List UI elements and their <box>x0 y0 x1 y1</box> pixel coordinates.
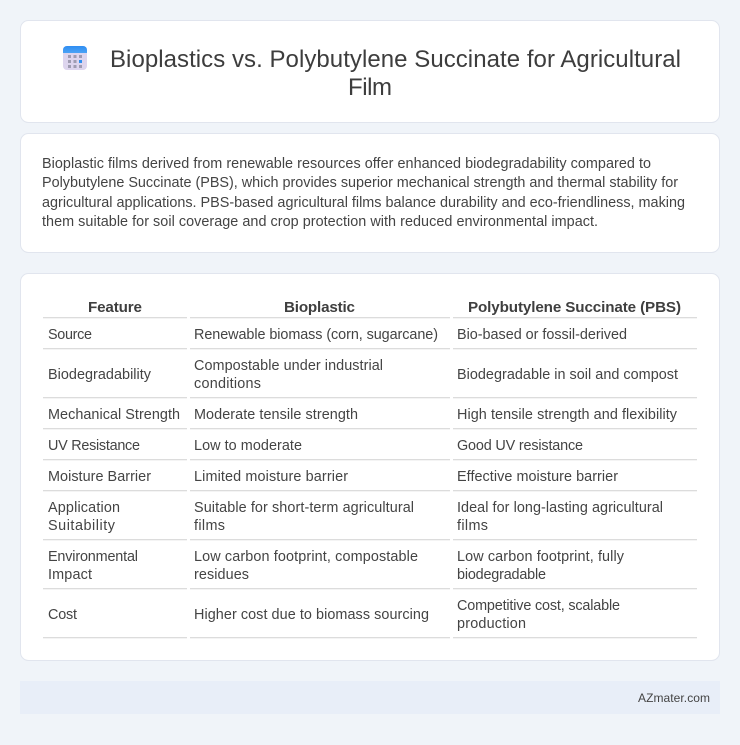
row: mechanical strength: High tensile strength and flexibility <box>457 407 678 423</box>
row: environmental impact: Environmental <box>48 549 138 565</box>
intro paragraph <box>42 156 685 230</box>
row: moisture barrier: Effective moisture barrier <box>457 469 618 485</box>
row: application suitability: Suitable for short-term agricultural <box>194 500 414 516</box>
row: cost: production <box>457 616 526 632</box>
row: application suitability: Application <box>48 500 120 516</box>
footer <box>20 681 720 714</box>
table header: Polybutylene Succinate (PBS) <box>468 299 681 316</box>
panel: title card <box>20 20 720 122</box>
row: biodegradability: Biodegradability <box>48 367 152 383</box>
table header: Bioplastic <box>284 299 355 316</box>
table header <box>88 299 681 316</box>
intro paragraph: agricultural applications. PBS-based agricultural films balance durability and eco-friendliness, making <box>42 195 685 211</box>
row: UV resistance: Good UV resistance <box>457 438 583 454</box>
footer: AZmater.com <box>638 691 710 705</box>
panel: intro text <box>20 134 720 252</box>
row: moisture barrier: Limited moisture barrier <box>194 469 348 485</box>
row: source <box>48 327 627 343</box>
row: mechanical strength <box>48 407 678 423</box>
row: UV resistance: Low to moderate <box>194 438 302 454</box>
icon: calendar <box>63 46 87 70</box>
table header: Feature <box>88 299 142 316</box>
row: environmental impact: residues <box>194 567 249 583</box>
row: application suitability <box>48 500 663 534</box>
row: source: Renewable biomass (corn, sugarcane) <box>194 327 438 343</box>
row: cost: Cost <box>48 607 77 623</box>
row: mechanical strength: Moderate tensile strength <box>194 407 358 423</box>
row: cost: Competitive cost, scalable <box>457 598 620 614</box>
title <box>110 46 681 101</box>
row: moisture barrier <box>48 469 618 485</box>
intro paragraph: Polybutylene Succinate (PBS), which provides superior mechanical strength and thermal stability for <box>42 175 678 191</box>
row: biodegradability: Biodegradable in soil and compost <box>457 367 678 383</box>
row: application suitability: films <box>457 518 488 534</box>
intro paragraph: them suitable for soil coverage and crop protection with reduced environmental impact. <box>42 214 598 230</box>
row: environmental impact <box>48 549 625 583</box>
row: mechanical strength: Mechanical Strength <box>48 407 180 423</box>
row: source: Bio-based or fossil-derived <box>457 327 627 343</box>
row: environmental impact: Impact <box>48 567 92 583</box>
row: application suitability: films <box>194 518 225 534</box>
row: environmental impact: Low carbon footprint, fully <box>457 549 625 565</box>
row: application suitability: Suitability <box>48 518 116 534</box>
row: environmental impact: biodegradable <box>457 567 546 583</box>
row: cost: Higher cost due to biomass sourcing <box>194 607 429 623</box>
panel: comparison table <box>20 274 720 660</box>
row: source: Source <box>48 327 92 343</box>
row: biodegradability <box>48 358 678 392</box>
row: biodegradability: Compostable under industrial <box>194 358 383 374</box>
row: UV resistance: UV Resistance <box>48 438 140 454</box>
row: moisture barrier: Moisture Barrier <box>48 469 151 485</box>
intro paragraph: Bioplastic films derived from renewable resources offer enhanced biodegradability compared to <box>42 156 651 172</box>
title: Bioplastics vs. Polybutylene Succinate for Agricultural <box>110 46 681 73</box>
row: UV resistance <box>48 438 583 454</box>
title: Film <box>348 74 392 101</box>
row: cost <box>48 598 620 632</box>
row: biodegradability: conditions <box>194 376 261 392</box>
row: environmental impact: Low carbon footprint, compostable <box>194 549 418 565</box>
row: application suitability: Ideal for long-lasting agricultural <box>457 500 663 516</box>
